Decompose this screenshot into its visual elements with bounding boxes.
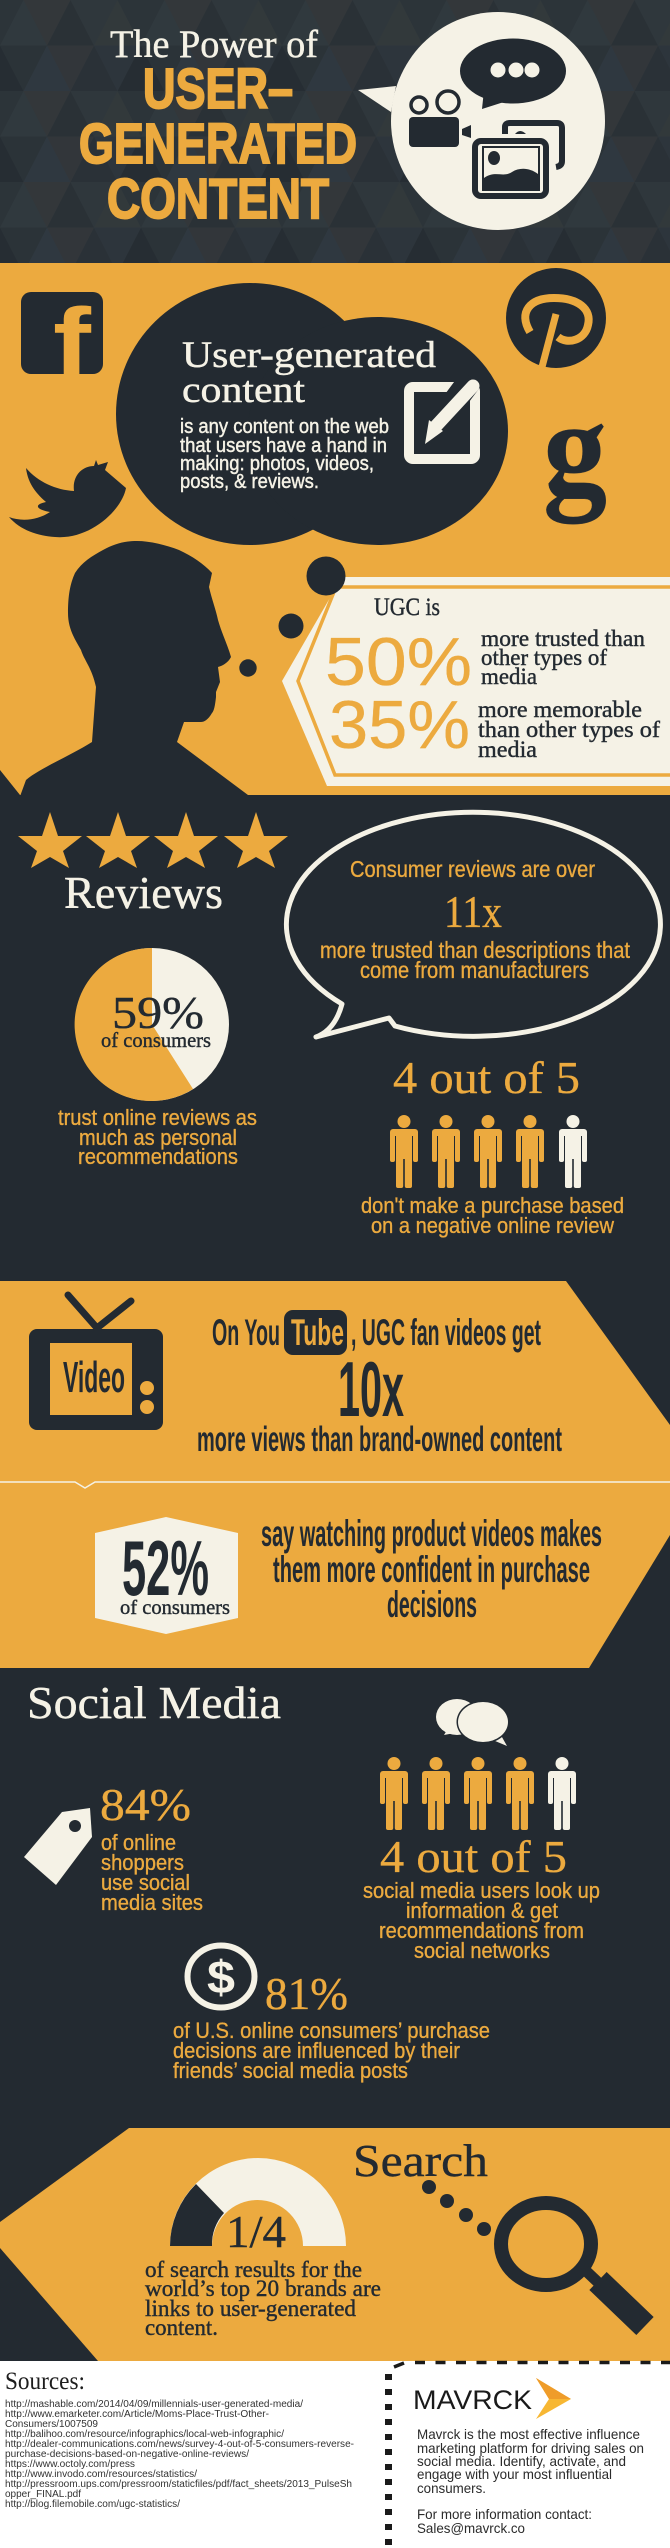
text: negative review — [361, 1193, 624, 1238]
heading: sources: Sources: — [5, 2368, 85, 2395]
text: negative review: don't make a purchase based — [361, 1193, 624, 1218]
text: search results — [145, 2257, 381, 2340]
text: definition: is any content on the web — [180, 416, 389, 438]
text: about mavrck: social media. Identify, activate, and — [417, 2453, 626, 2469]
text: on youtube: On You — [212, 1312, 280, 1353]
text: search results: world’s top 20 brands are — [145, 2276, 381, 2301]
text: more trusted: media — [481, 664, 537, 689]
banner: UGC stats — [282, 577, 670, 786]
callout: 11x speech bubble: come from manufacturers — [360, 957, 589, 983]
text: more memorable: media — [478, 737, 537, 762]
icon: facebook — [21, 289, 103, 395]
stat: 4 out of 5: 4 out of 5 — [393, 1052, 580, 1103]
text: UGC is: UGC is — [374, 594, 440, 621]
text: about mavrck: consumers. — [417, 2480, 486, 2496]
text: source urls: http://dealer-communications.com/news/survey-4-out-of-5-consumers-reverse- — [5, 2439, 354, 2450]
stat: 4 out of 5: 4 out of 5 — [380, 1831, 567, 1882]
heading: user-generated content: User-generated — [182, 335, 437, 376]
heading: social media: Social Media — [27, 1677, 281, 1728]
text: source urls: Consumers/1007509 — [5, 2419, 98, 2430]
badge: 52% hexagon: of consumers — [120, 1597, 230, 1619]
icon: photo frames — [475, 123, 562, 196]
text: consumer decisions: friends’ social media posts — [173, 2058, 408, 2083]
panel: thought cloud — [116, 283, 508, 545]
text: social users: social networks — [414, 1938, 550, 1963]
text: about mavrck — [417, 2426, 644, 2536]
text: about mavrck: For more information contact: — [417, 2506, 592, 2522]
text: product videos: decisions — [387, 1584, 477, 1625]
stat: 10x: 10x — [338, 1345, 404, 1433]
callout: 11x speech bubble: more trusted than descriptions that — [320, 937, 631, 963]
callout: 11x speech bubble: Consumer reviews are over — [350, 856, 595, 882]
icon: stars — [18, 812, 288, 868]
stat: 50%: 50% — [325, 624, 472, 700]
text: consumer decisions: decisions are influenced by their — [173, 2038, 460, 2063]
panel: header — [0, 0, 670, 263]
text: product videos — [261, 1513, 602, 1625]
icon: dollar coin: $ — [207, 1951, 235, 2003]
text: trust online reviews: recommendations — [78, 1144, 238, 1169]
icon: five people — [390, 1115, 587, 1188]
text: more trusted: other types of — [481, 645, 607, 670]
panel: reviews — [18, 812, 660, 1238]
text: trust online reviews: trust online reviews as — [58, 1105, 257, 1130]
text: more memorable: than other types of — [478, 717, 660, 742]
icon: five people — [380, 1757, 576, 1830]
icon: head silhouette — [20, 541, 248, 795]
panel: definition — [0, 263, 670, 795]
text: online shoppers: of online — [101, 1830, 176, 1855]
panel: social media — [24, 1677, 600, 2083]
callout: 11x speech bubble: 11x — [444, 886, 502, 937]
title: The Power of — [110, 23, 318, 66]
text: source urls: http://pressroom.ups.com/pressroom/staticfiles/pdf/fact_sheets/2013_PulseSh — [5, 2479, 352, 2490]
badge: 52% hexagon: 52% — [122, 1524, 209, 1612]
logo: mavrck: MAVRCK — [413, 2385, 532, 2415]
icon: dotted trail — [422, 2180, 491, 2236]
text: source urls: http://www.invodo.com/resources/statistics/ — [5, 2469, 197, 2480]
panel: search — [0, 2128, 670, 2361]
text: online shoppers: media sites — [101, 1890, 203, 1915]
icon: twitter — [9, 460, 126, 537]
text: definition — [180, 416, 389, 493]
callout: 11x speech bubble — [286, 812, 660, 1037]
text: consumer decisions: of U.S. online consumers’ purchase — [173, 2018, 490, 2043]
text: definition: that users have a hand in — [180, 435, 387, 457]
text: consumer decisions — [173, 2018, 490, 2083]
text: social users — [363, 1878, 600, 1963]
heading: search: Search — [353, 2135, 488, 2186]
icon: edit pencil — [409, 378, 475, 459]
heading: user-generated content — [182, 335, 437, 411]
text: more memorable: more memorable — [478, 697, 642, 722]
text: search results: links to user-generated — [145, 2296, 356, 2321]
heading: reviews: Reviews — [64, 867, 223, 918]
text: social users: information & get — [406, 1898, 558, 1923]
text: online shoppers: use social — [101, 1870, 190, 1895]
text: definition: making: photos, videos, — [180, 453, 374, 475]
icon: facebook: f — [53, 289, 91, 395]
title: USER– — [143, 57, 293, 121]
chart: 59% pie — [75, 948, 229, 1101]
title: CONTENT — [107, 167, 329, 231]
text: about mavrck: marketing platform for driving sales on — [417, 2440, 644, 2456]
stat: 35%: 35% — [329, 687, 470, 763]
icon: dollar coin — [188, 1946, 254, 2008]
logo: mavrck — [413, 2378, 571, 2419]
icon: tv — [29, 1295, 163, 1430]
icon: chat bubbles — [436, 1699, 510, 1746]
icon: google: g — [543, 372, 607, 524]
panel: mavrck — [388, 2362, 670, 2548]
icon: media speech bubble — [358, 12, 605, 230]
chart: 59% pie: 59% — [112, 987, 204, 1038]
title: GENERATED — [79, 112, 357, 176]
text: about mavrck: engage with your most influential — [417, 2466, 612, 2482]
chart: 59% pie: of consumers — [101, 1028, 211, 1052]
text: source urls — [5, 2399, 354, 2510]
text: social users: social media users look up — [363, 1878, 600, 1903]
text: more trusted — [481, 626, 645, 689]
icon: chat bubble — [460, 38, 566, 109]
decorative notch: left corner — [0, 770, 20, 795]
title — [79, 23, 357, 231]
icon: pinterest — [506, 268, 606, 368]
text: more memorable — [478, 697, 660, 762]
text: more trusted: more trusted than — [481, 626, 645, 651]
thought bubbles — [239, 556, 346, 677]
text: about mavrck: Mavrck is the most effective influence — [417, 2426, 640, 2442]
chart: one-quarter gauge: 1/4 — [226, 2206, 286, 2257]
stat: 81%: 81% — [265, 1968, 348, 2019]
text: source urls: http://mashable.com/2014/04/09/millennials-user-generated-media/ — [5, 2399, 303, 2410]
icon: price tag — [24, 1808, 92, 1885]
text: trust online reviews: much as personal — [79, 1125, 237, 1150]
text: social users: recommendations from — [379, 1918, 584, 1943]
text: online shoppers — [101, 1830, 203, 1915]
text: source urls: https://www.octoly.com/press — [5, 2459, 135, 2470]
panel: video — [0, 1281, 670, 1668]
text: about mavrck: Sales@mavrck.co — [417, 2520, 525, 2536]
text: search results: of search results for the — [145, 2257, 362, 2282]
badge: 52% hexagon — [95, 1517, 238, 1634]
heading: user-generated content: content — [182, 370, 306, 411]
text: on youtube: Tube — [291, 1312, 344, 1353]
text: negative review: on a negative online review — [371, 1213, 614, 1238]
text: source urls: http://blog.filemobile.com/ugc-statistics/ — [5, 2499, 180, 2510]
icon: video camera — [409, 91, 471, 147]
text: search results: content. — [145, 2315, 218, 2340]
chart: one-quarter gauge — [170, 2158, 346, 2257]
icon: tv: Video — [63, 1353, 125, 1402]
stat: 84%: 84% — [100, 1779, 191, 1830]
text: definition: posts, & reviews. — [180, 471, 319, 493]
text: source urls: http://balihoo.com/resource/infographics/local-web-infographic/ — [5, 2429, 284, 2440]
text: source urls: opper_FINAL.pdf — [5, 2489, 81, 2500]
text: online shoppers: shoppers — [101, 1850, 184, 1875]
text: source urls: purchase-decisions-based-on-negative-online-reviews/ — [5, 2449, 249, 2460]
icon: magnifier — [501, 2203, 645, 2326]
text: source urls: http://www.emarketer.com/Article/Moms-Place-Trust-Other- — [5, 2409, 269, 2420]
text: on youtube — [212, 1310, 541, 1355]
panel: sources — [5, 2368, 354, 2510]
text: trust online reviews — [58, 1105, 257, 1169]
